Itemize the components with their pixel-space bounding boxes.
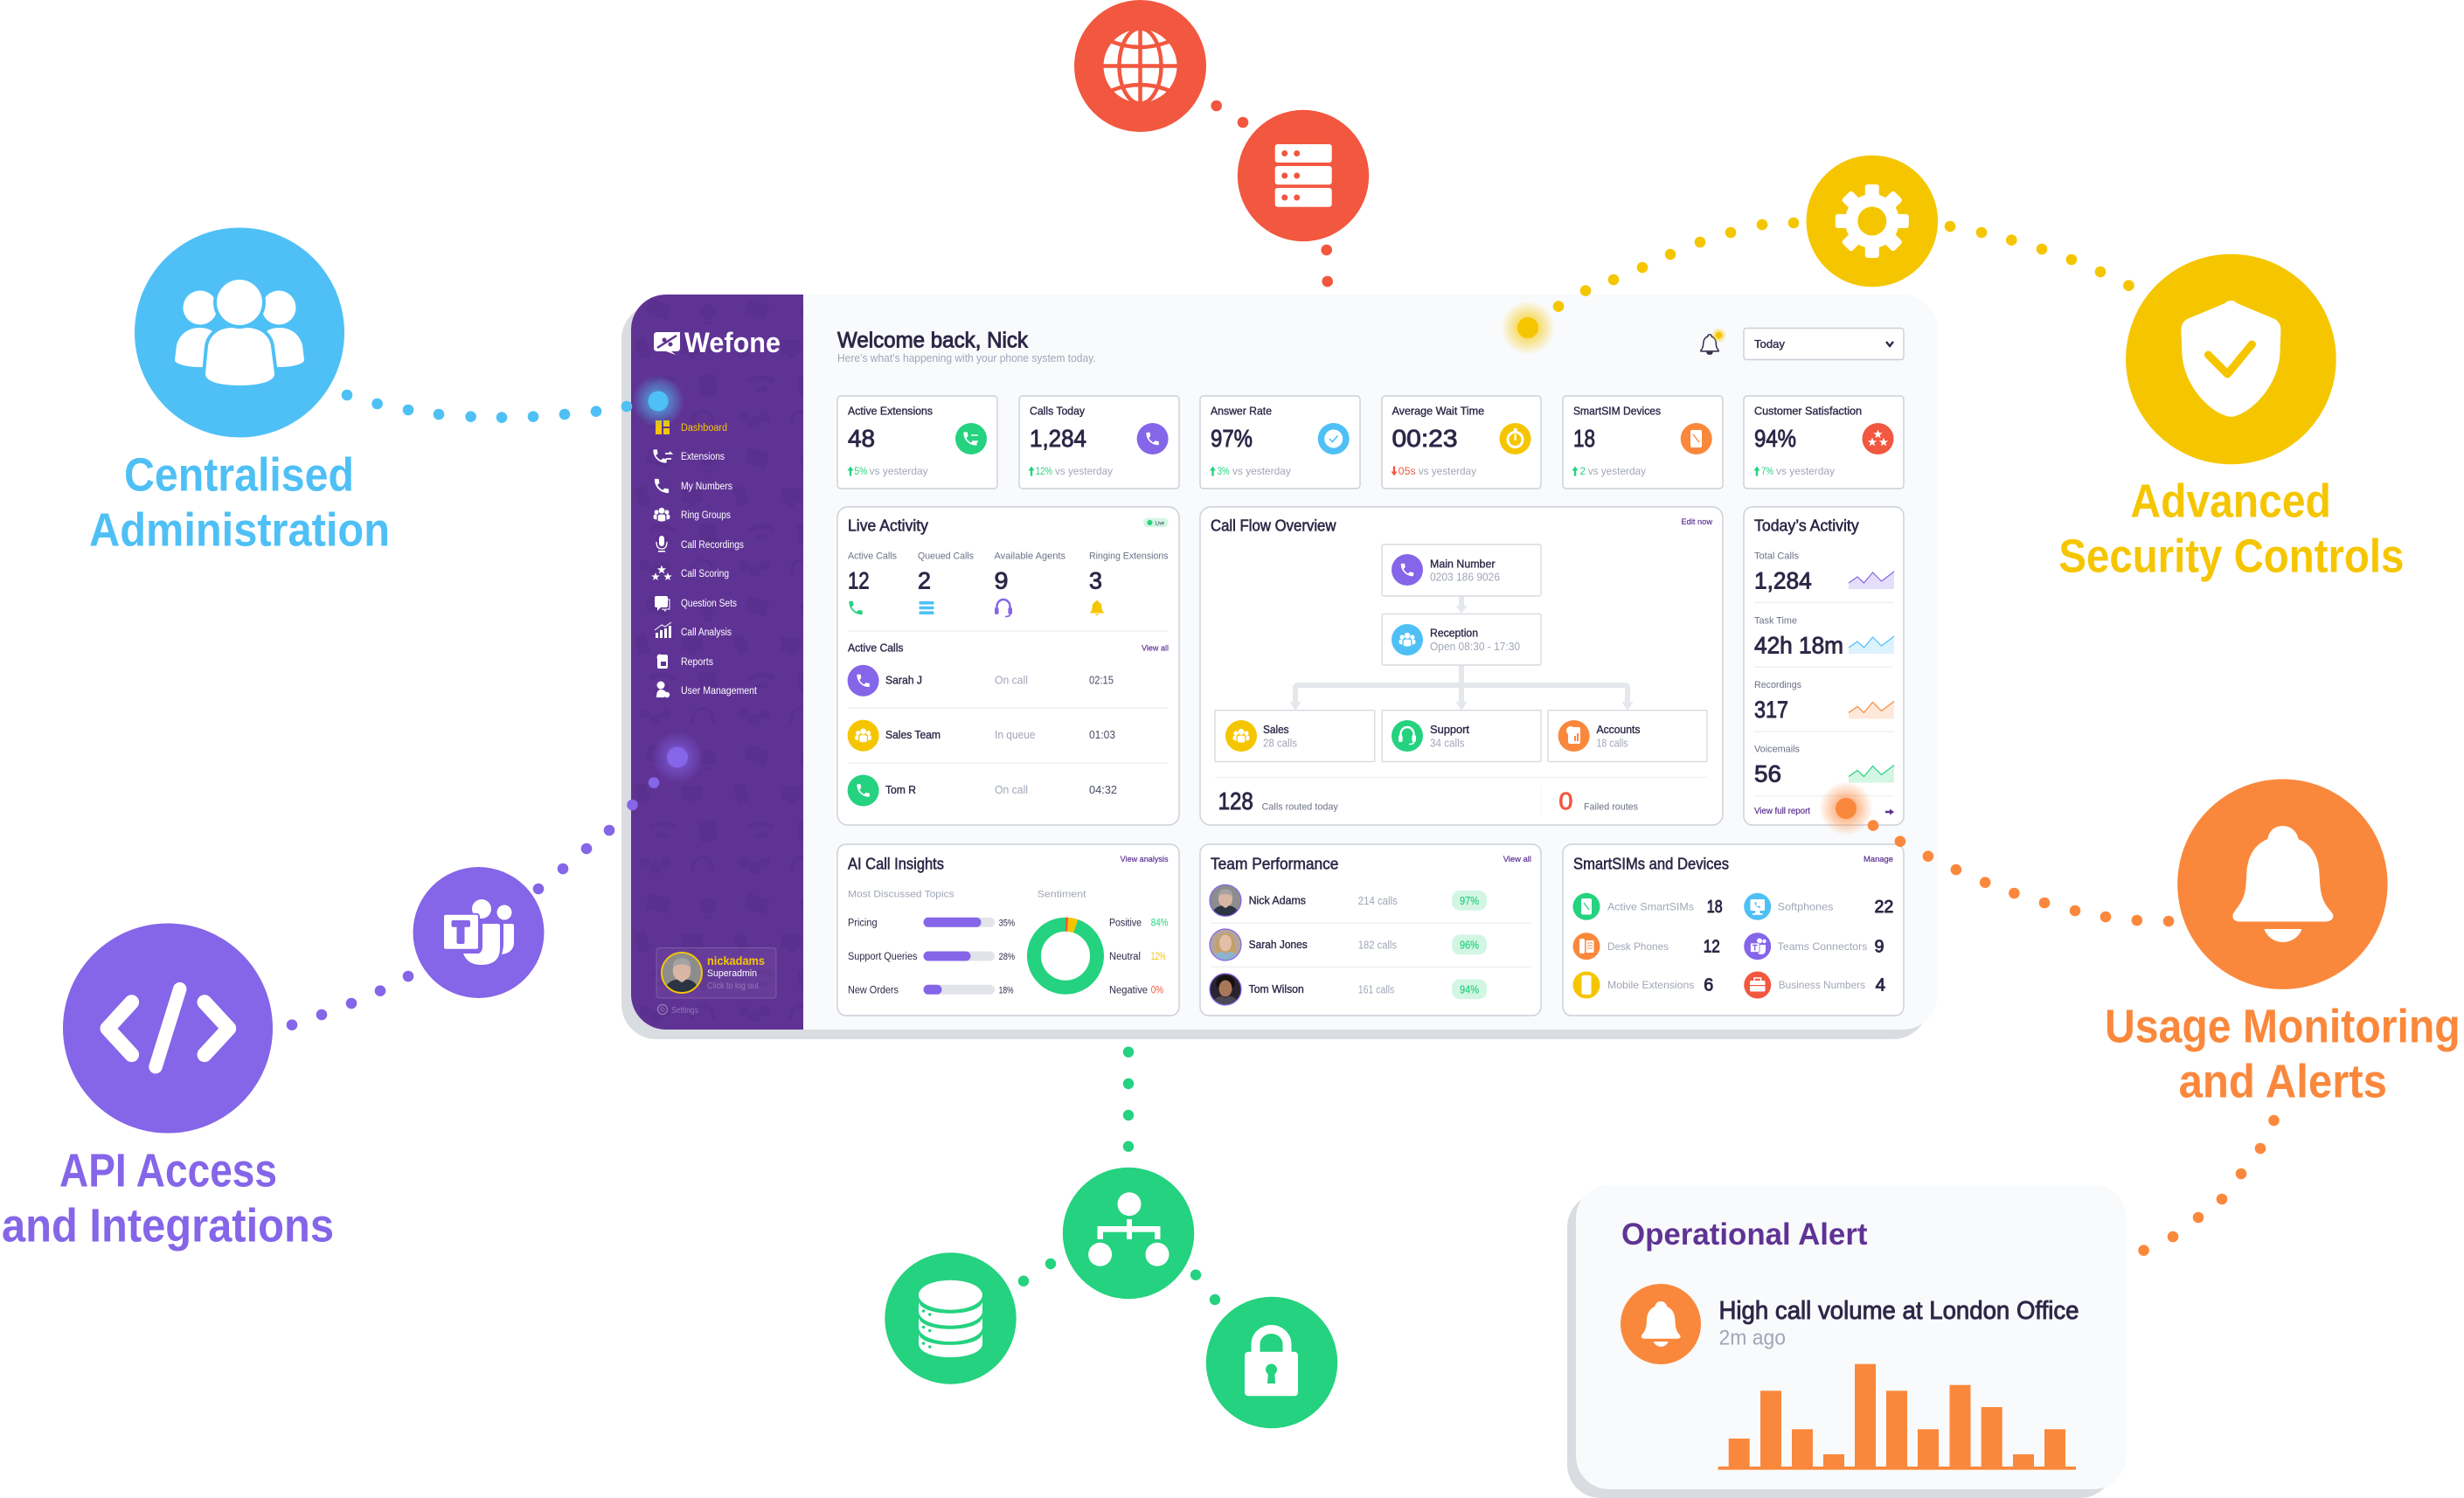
kpi card: Answer Rate: Answer Rate (1211, 406, 1272, 418)
node: Support (1382, 711, 1541, 761)
bar: New Orders: 18% (999, 985, 1014, 995)
metric: Recordings: Recordings (1754, 680, 1801, 690)
row: Tom Wilson (1210, 974, 1487, 1005)
dotted path: orange to alert (2138, 1115, 2280, 1256)
alert shadow (1567, 1194, 2113, 1498)
row: Sarah J: 02:15 (1089, 673, 1114, 686)
logo: Wefone: Wefone (684, 327, 781, 358)
metric: Voicemails (1754, 745, 1894, 787)
subheading: Active Calls: Active Calls (848, 642, 904, 655)
icon: code (63, 923, 273, 1133)
legend: sentiment: Neutral (1109, 952, 1141, 962)
label: Centralised Administration (89, 449, 390, 556)
metric: Total Calls: Total Calls (1754, 551, 1799, 561)
stat: failed routes (1558, 787, 1638, 815)
item: Mobile Extensions: Mobile Extensions (1607, 979, 1694, 991)
dotted path: red (1211, 101, 1333, 287)
label: Advanced Security Controls: Security Controls (2058, 530, 2404, 582)
icon: shield (2126, 254, 2336, 464)
row: Tom R: 04:32 (1089, 783, 1117, 796)
legend: sentiment: Positive (1109, 918, 1142, 928)
panel: Live Activity (837, 507, 1179, 825)
glow node: orange (1819, 781, 1873, 836)
row: Sarah Jones: Sarah Jones (1249, 938, 1308, 951)
subheading: topics and sentiment: Sentiment (1038, 889, 1086, 899)
alert message: High call volume at London Office (1718, 1297, 2079, 1325)
heading: welcome (837, 329, 1096, 364)
icon: padlock (1206, 1297, 1337, 1428)
stat: Queued Calls (918, 551, 974, 614)
item: Desk Phones (1573, 933, 1720, 960)
user card: nickadams: Click to log out (707, 981, 759, 991)
panel: Today's Activity (1744, 507, 1904, 825)
glow node: purple (651, 731, 704, 783)
metric: Voicemails: 56 (1754, 761, 1781, 787)
donut chart: sentiment (1034, 925, 1097, 988)
date selector (1744, 329, 1904, 360)
icon: server (1238, 110, 1369, 241)
kpi card: Active Extensions: 5% (854, 465, 868, 477)
nav item: Call Scoring (651, 565, 729, 580)
metric: Total Calls (1754, 551, 1894, 594)
row: Nick Adams: 214 calls (1358, 894, 1398, 907)
item: Desk Phones: Desk Phones (1607, 940, 1669, 953)
item: Softphones (1744, 893, 1893, 920)
kpi card: Answer Rate: vs yesterday (1232, 465, 1291, 477)
kpi card: Average Wait Time: 05s (1399, 465, 1416, 477)
heading: welcome: Here’s what’s happening with your phone system today. (837, 352, 1096, 364)
nav item: Reports: Reports (681, 657, 713, 668)
settings link: Settings (671, 1005, 698, 1016)
panel: dashboard window (621, 295, 1938, 1039)
node: Accounts: Accounts (1596, 723, 1641, 736)
stat: failed routes: 0 (1558, 787, 1573, 815)
icon: bell (2177, 780, 2388, 989)
link: View full report: View full report (1754, 807, 1810, 816)
nav item: Call Recordings: Call Recordings (681, 540, 744, 551)
row: Tom R: On call (995, 783, 1028, 796)
nav item: Dashboard (656, 420, 727, 434)
panel: Call Flow Overview (1200, 507, 1723, 825)
avatar: nickadams (662, 953, 702, 993)
heading: Today's Activity: Today’s Activity (1754, 517, 1859, 535)
glow node: yellow (1501, 301, 1555, 355)
icon: network (1063, 1168, 1194, 1299)
row: Sarah Jones: 96% (1460, 939, 1479, 951)
kpi card: Customer Satisfaction: 94% (1754, 425, 1796, 452)
kpi card: Active Extensions (837, 396, 997, 489)
row: Tom Wilson: Tom Wilson (1249, 982, 1304, 995)
node: Sales: Sales (1263, 723, 1289, 736)
row: Sales Team (848, 720, 1115, 752)
nav item: User Management: User Management (681, 686, 758, 697)
dotted path: purple (287, 777, 659, 1030)
nav item: Call Analysis (655, 622, 732, 638)
node: Sales (1215, 711, 1375, 761)
kpi card: Active Extensions: vs yesterday (870, 465, 928, 477)
kpi card: Average Wait Time: 00:23 (1392, 425, 1458, 452)
row: Nick Adams: Nick Adams (1249, 893, 1306, 907)
heading: SmartSIMs and Devices (1573, 855, 1893, 872)
nav item: Call Analysis: Call Analysis (681, 628, 732, 638)
badge: live: Live (1156, 520, 1164, 526)
panel: SmartSIMs and Devices (1563, 844, 1904, 1016)
stat: failed routes: Failed routes (1584, 802, 1638, 813)
nav item: Ring Groups: Ring Groups (681, 510, 731, 521)
flow connectors (1290, 596, 1633, 711)
item: Active SmartSIMs: Active SmartSIMs (1607, 900, 1694, 912)
label: Usage Monitoring and Alerts (2105, 1000, 2461, 1108)
item: Desk Phones: 12 (1704, 937, 1720, 956)
feature: Usage Monitoring and Alerts (2105, 780, 2461, 1108)
kpi card: Customer Satisfaction: vs yesterday (1776, 465, 1835, 477)
node: Support: Support (1430, 723, 1469, 736)
heading: Live Activity: Live Activity (848, 517, 928, 535)
stat: Active Calls (848, 551, 897, 614)
badge: live (1143, 518, 1168, 527)
icon: Microsoft Teams (413, 867, 544, 998)
label: Usage Monitoring and Alerts: and Alerts (2179, 1056, 2387, 1108)
row: Sarah J: On call (995, 673, 1028, 686)
node: Main Number (1382, 544, 1541, 596)
sidebar background (631, 295, 803, 1030)
dashboard drop shadow (621, 304, 1928, 1039)
legend: sentiment: 84% (1151, 918, 1168, 928)
metric: Task Time (1754, 615, 1894, 658)
node: Support: 34 calls (1430, 738, 1465, 750)
subheading: Active Calls: View all (1142, 643, 1169, 654)
kpi card: Customer Satisfaction: Customer Satisfaction (1754, 406, 1862, 418)
link: View full report (1754, 807, 1894, 816)
icon: users (135, 227, 344, 437)
row: Tom Wilson: 161 calls (1358, 982, 1395, 996)
item: Mobile Extensions (1573, 972, 1713, 998)
date selector: Today (1754, 337, 1785, 350)
panel: AI Call Insights (837, 844, 1179, 1016)
heading: Call Flow Overview: Edit now (1682, 517, 1712, 527)
item: Teams Connectors: 9 (1874, 937, 1884, 956)
label: Centralised Administration: Administration (89, 503, 390, 556)
stat: Active Calls: Active Calls (848, 551, 897, 561)
nav item: Call Recordings (656, 536, 744, 552)
sidebar pattern (631, 295, 803, 1030)
nav item: Extensions (653, 449, 725, 463)
kpi card: Calls Today: Calls Today (1030, 406, 1086, 418)
stat: Queued Calls: 2 (918, 568, 931, 594)
nav item: User Management (656, 682, 758, 697)
bar: Pricing (848, 918, 1015, 928)
stat: Active Calls: 12 (848, 568, 870, 594)
stat: Available Agents: Available Agents (995, 551, 1065, 561)
legend: sentiment: 12% (1151, 952, 1166, 962)
bar: Support Queries: 28% (999, 952, 1015, 962)
heading: Team Performance: View all (1503, 855, 1531, 864)
icon: notification bell (1701, 328, 1727, 354)
heading: Call Flow Overview: Call Flow Overview (1211, 517, 1336, 535)
heading: SmartSIMs and Devices: Manage (1864, 855, 1893, 864)
bar: Pricing: Pricing (848, 918, 878, 928)
panel: sidebar (631, 295, 803, 1030)
heading: AI Call Insights: AI Call Insights (848, 855, 944, 872)
kpi card: Customer Satisfaction: 7% (1761, 465, 1773, 477)
node: Accounts (1548, 711, 1707, 761)
heading: Call Flow Overview (1211, 517, 1712, 535)
node: Main Number: 0203 186 9026 (1430, 572, 1500, 584)
legend: sentiment: 0% (1151, 985, 1163, 995)
kpi card: Average Wait Time (1382, 396, 1541, 489)
nav item: Extensions: Extensions (681, 452, 725, 462)
row: Sarah Jones (1210, 929, 1487, 961)
nav item: Call Scoring: Call Scoring (681, 569, 729, 579)
item: Business Numbers: 4 (1876, 975, 1885, 995)
item: Teams Connectors (1744, 933, 1884, 960)
legend: sentiment: Negative (1109, 985, 1148, 995)
metric: Recordings (1754, 680, 1894, 723)
node: Main Number: Main Number (1430, 558, 1496, 570)
stat: Ringing Extensions: Ringing Extensions (1089, 551, 1169, 561)
item: Mobile Extensions: 6 (1704, 975, 1713, 995)
row: Sarah J: Sarah J (885, 673, 922, 686)
nav item: Dashboard: Dashboard (681, 423, 727, 433)
kpi card: Active Extensions: Active Extensions (848, 406, 933, 418)
icon: alert bell (1621, 1284, 1701, 1364)
metric: Task Time: 42h 18m (1754, 632, 1843, 658)
heading: AI Call Insights (848, 855, 1169, 872)
bar chart: call volume (1718, 1364, 2076, 1470)
stat: Queued Calls: Queued Calls (918, 551, 974, 561)
panel: Operational Alert (1567, 1185, 2127, 1498)
item: Business Numbers: Business Numbers (1779, 979, 1865, 991)
heading: Team Performance: Team Performance (1211, 855, 1338, 872)
icon: gear (1806, 156, 1938, 287)
kpi card: SmartSIM Devices: 18 (1573, 425, 1595, 452)
row: Sales Team: Sales Team (885, 728, 940, 741)
bar: Pricing: 35% (999, 918, 1015, 928)
item: Softphones: Softphones (1778, 900, 1833, 912)
node: Accounts: 18 calls (1596, 738, 1628, 750)
item: Teams Connectors: Teams Connectors (1778, 940, 1867, 953)
heading: AI Call Insights: View analysis (1121, 855, 1169, 864)
item: Business Numbers (1744, 972, 1885, 998)
kpi card: Calls Today: vs yesterday (1055, 465, 1113, 477)
kpi card: Calls Today: 12% (1036, 465, 1052, 477)
dotted path: orange to bell (1868, 820, 2174, 926)
kpi card: Calls Today (1019, 396, 1179, 489)
kpi card: Customer Satisfaction (1744, 396, 1904, 489)
icon: database (885, 1252, 1017, 1384)
dashboard background (631, 295, 1938, 1030)
stat: Available Agents: 9 (995, 568, 1009, 594)
node: Reception (1382, 614, 1541, 665)
glow node: blue (632, 375, 684, 427)
heading: SmartSIMs and Devices: SmartSIMs and Devices (1573, 855, 1729, 872)
stat: calls routed today: Calls routed today (1262, 802, 1338, 813)
bar: Support Queries: Support Queries (848, 952, 918, 962)
stat: calls routed today: 128 (1218, 787, 1253, 815)
stat: Ringing Extensions: 3 (1089, 568, 1102, 594)
label: Centralised Administration: Centralised (124, 449, 354, 502)
bar: New Orders: New Orders (848, 985, 899, 995)
kpi card: Active Extensions: 48 (848, 425, 875, 452)
dotted path: yellow (1553, 218, 2134, 312)
settings link (657, 1005, 698, 1016)
legend: sentiment (1109, 918, 1168, 995)
item: Softphones: 22 (1874, 898, 1893, 917)
label: API Access and Integrations: and Integrations (2, 1199, 334, 1252)
feature: API Access and Integrations (2, 923, 334, 1252)
bar: Support Queries (848, 951, 1015, 962)
node: Reception: Open 08:30 - 17:30 (1430, 641, 1520, 653)
item: Active SmartSIMs (1573, 893, 1723, 920)
subheading: topics and sentiment (848, 889, 1086, 899)
kpi card: Average Wait Time: Average Wait Time (1392, 406, 1484, 418)
label: Advanced Security Controls (2058, 475, 2404, 582)
row: Tom R: Tom R (885, 783, 916, 796)
label: API Access and Integrations (2, 1145, 334, 1252)
subheading: topics and sentiment: Most Discussed Topics (848, 889, 954, 899)
dotted path: green (1018, 1047, 1220, 1305)
kpi card: Answer Rate: 3% (1218, 465, 1230, 477)
kpi card: SmartSIM Devices: 2 (1580, 465, 1586, 477)
stat: Ringing Extensions (1089, 551, 1169, 615)
alert message (1718, 1297, 2079, 1350)
kpi card: SmartSIM Devices: SmartSIM Devices (1573, 406, 1661, 418)
icon: globe (1074, 0, 1206, 132)
heading: Operational Alert: Operational Alert (1621, 1217, 1868, 1252)
nav item: Question Sets: Question Sets (681, 599, 737, 609)
bar: New Orders (848, 985, 1014, 995)
kpi card: Answer Rate: 97% (1211, 425, 1253, 452)
row: Sarah Jones: 182 calls (1358, 939, 1397, 951)
row: Sales Team: In queue (995, 728, 1036, 741)
metric: Recordings: 317 (1754, 697, 1788, 723)
nav item: Ring Groups (654, 508, 731, 522)
subheading: Active Calls (848, 642, 1169, 655)
nav item: My Numbers: My Numbers (681, 482, 732, 492)
row: Tom Wilson: 94% (1460, 984, 1479, 996)
feature: Advanced Security Controls (2058, 254, 2404, 582)
label: Advanced Security Controls: Advanced (2130, 475, 2331, 528)
kpi card: Calls Today: 1,284 (1030, 425, 1086, 452)
heading: welcome: Welcome back, Nick (837, 329, 1028, 353)
item: Active SmartSIMs: 18 (1707, 898, 1723, 917)
kpi card: Average Wait Time: vs yesterday (1419, 465, 1476, 477)
row: Sales Team: 01:03 (1089, 728, 1115, 741)
user card: nickadams: Superadmin (707, 968, 757, 979)
kpi card: SmartSIM Devices (1563, 396, 1723, 489)
stat: calls routed today (1218, 787, 1338, 815)
user card: nickadams: nickadams (707, 954, 765, 967)
panel: Team Performance (1200, 844, 1541, 1016)
feature: Centralised Administration (89, 227, 390, 556)
metric: Total Calls: 1,284 (1754, 568, 1812, 594)
kpi card: SmartSIM Devices: vs yesterday (1588, 465, 1646, 477)
alert background (1576, 1185, 2127, 1489)
label: API Access and Integrations: API Access (59, 1145, 277, 1197)
row: Tom R (848, 774, 1117, 806)
dotted path: blue (342, 390, 632, 423)
stat: Available Agents (995, 551, 1065, 617)
node: Reception: Reception (1430, 626, 1478, 640)
alert message: 2m ago (1718, 1327, 1786, 1350)
node: Sales: 28 calls (1263, 738, 1297, 750)
nav item: Reports (657, 654, 713, 669)
heading: Team Performance (1211, 855, 1531, 872)
kpi card: Answer Rate (1200, 396, 1360, 489)
nav item: Question Sets (655, 596, 737, 611)
metric: Voicemails: Voicemails (1754, 745, 1800, 755)
row: Nick Adams: 97% (1460, 895, 1479, 907)
row: Nick Adams (1210, 884, 1487, 916)
user card: nickadams (656, 947, 776, 998)
metric: Task Time: Task Time (1754, 615, 1797, 626)
row: Sarah J (848, 665, 1114, 697)
nav item: My Numbers (655, 479, 732, 493)
